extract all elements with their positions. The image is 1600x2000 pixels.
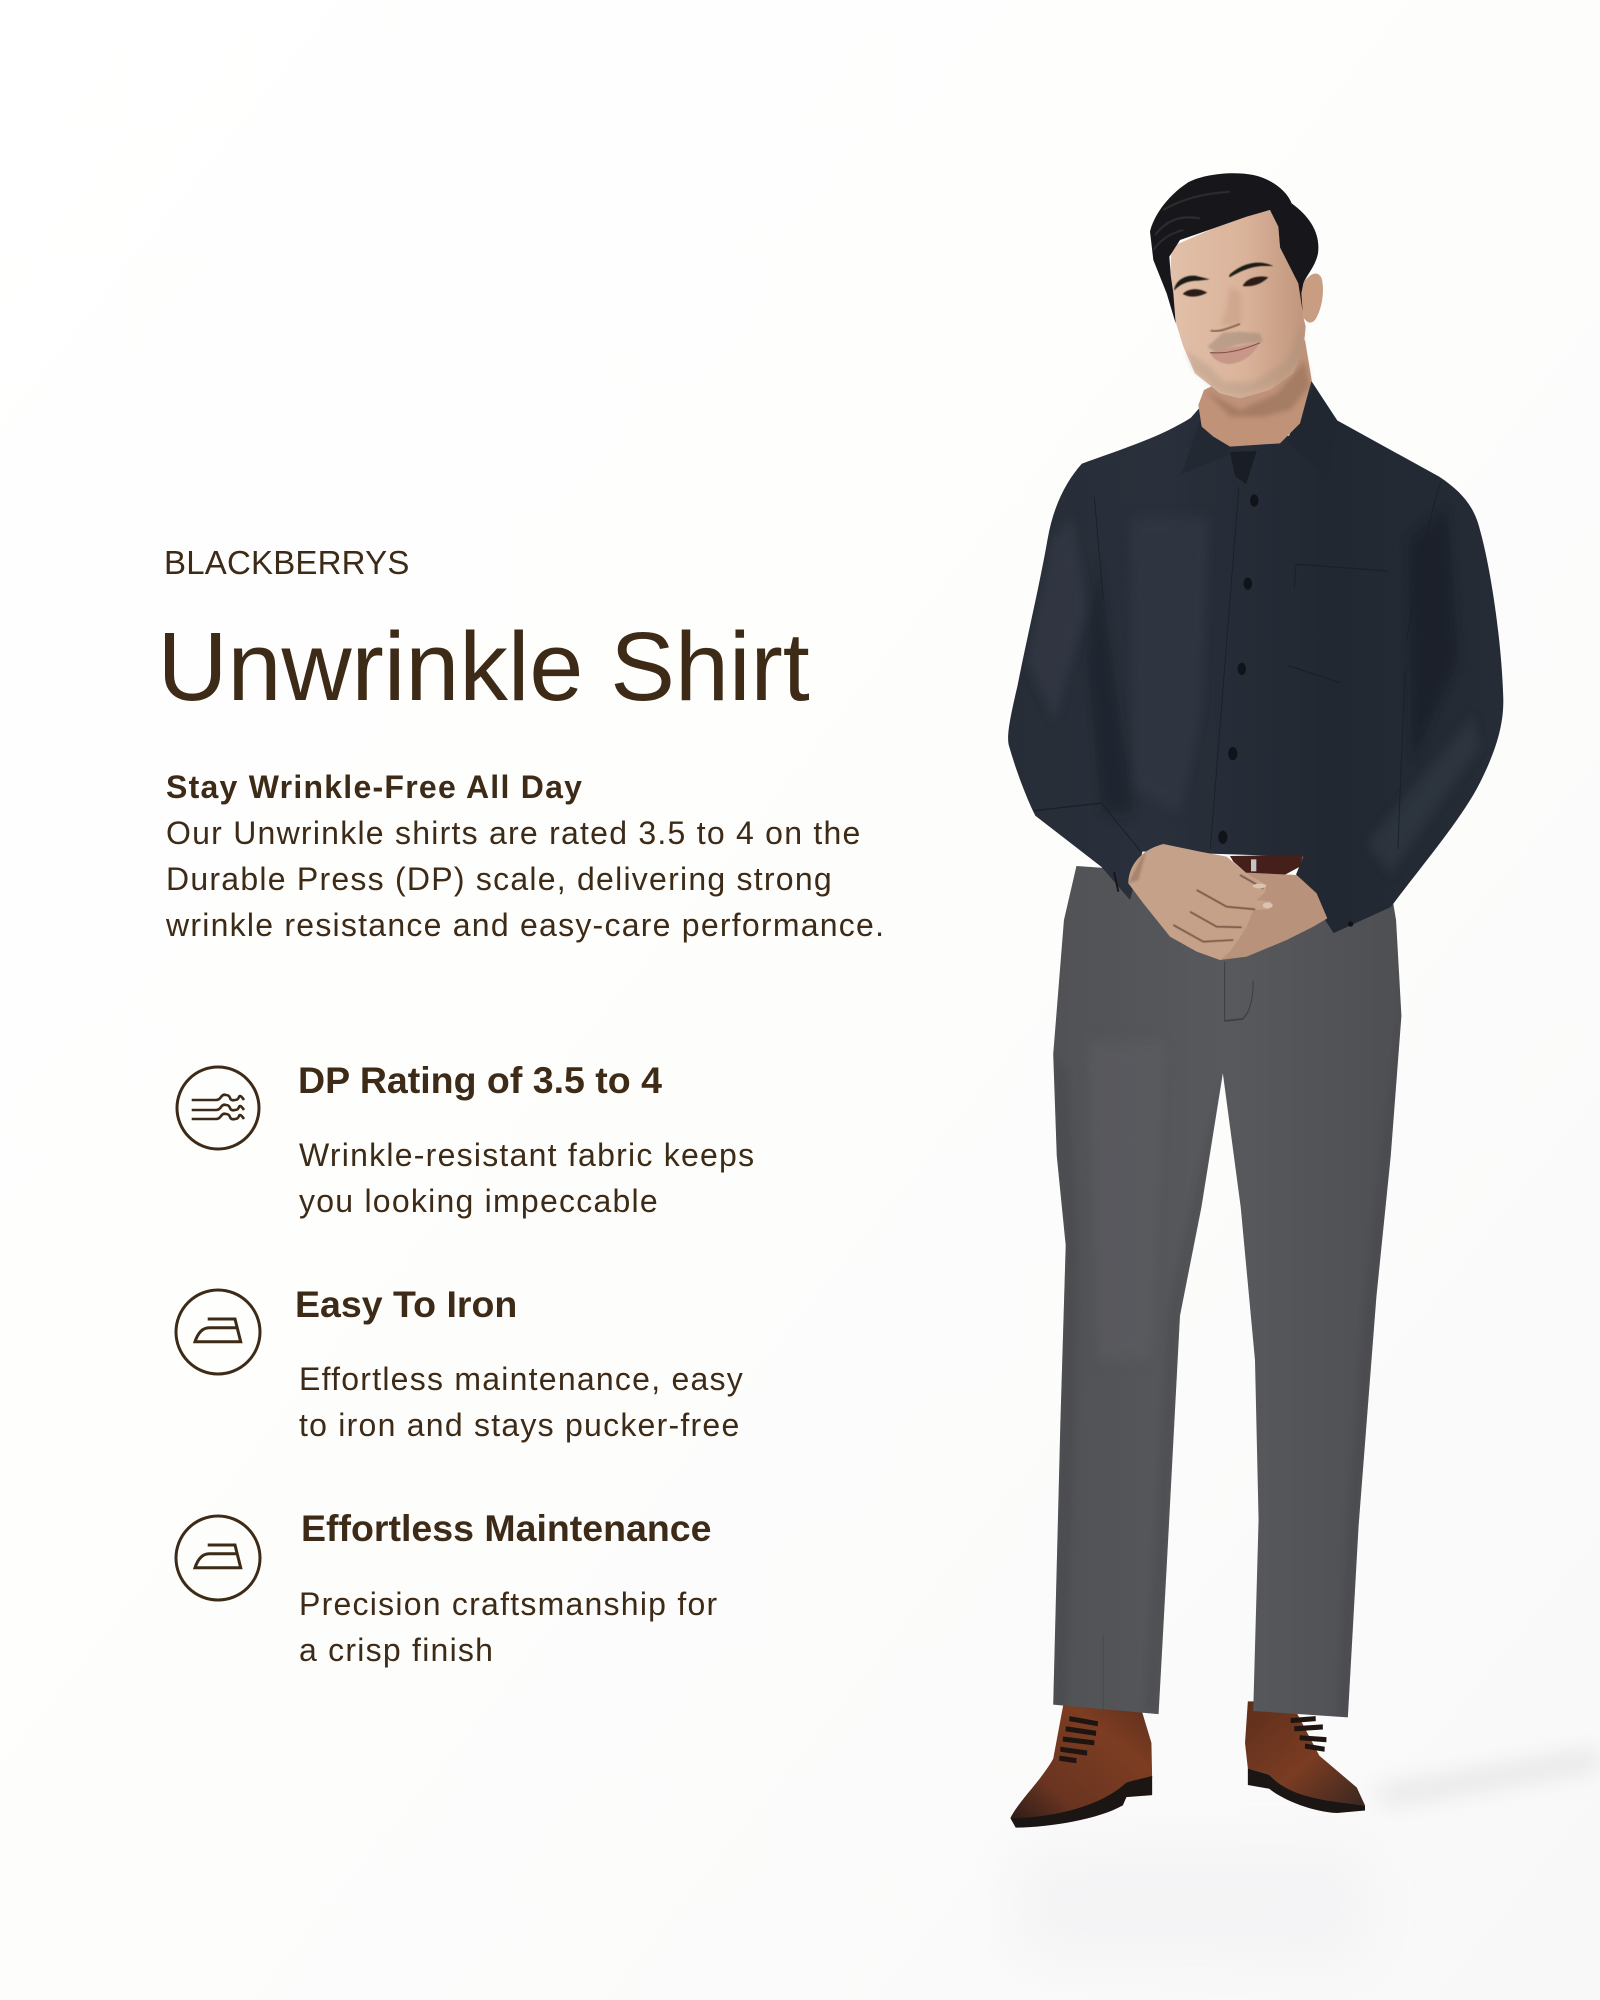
icon: fabric waves (177, 1067, 259, 1149)
neck, head and hair (1150, 173, 1323, 447)
description: easy to iron (299, 1361, 744, 1443)
shirt (1008, 380, 1503, 933)
eyebrows (1174, 263, 1273, 291)
description: effortless maintenance: Precision craftsmanship for (299, 1586, 718, 1622)
floor reflection (1015, 1850, 1365, 1960)
nose (1211, 324, 1240, 331)
eyes (1183, 276, 1268, 297)
description: effortless maintenance (299, 1586, 718, 1668)
ear (1298, 274, 1323, 323)
face (1170, 210, 1306, 398)
shirt buttons (1218, 494, 1259, 844)
hair (1150, 173, 1318, 323)
heading: effortless maintenance: Effortless Maintenance (301, 1507, 712, 1549)
lips (1210, 343, 1260, 364)
title: Unwrinkle Shirt (158, 612, 810, 721)
description: easy to iron: Effortless maintenance, easy (299, 1361, 744, 1397)
intro subheading: Stay Wrinkle-Free All Day (166, 769, 583, 805)
stubble (1185, 320, 1303, 397)
floor shadow (1370, 1750, 1600, 1804)
hands (1114, 844, 1353, 960)
description: easy to iron: to iron and stays pucker-free (299, 1407, 740, 1443)
intro paragraph: wrinkle resistance and easy-care performance. (165, 907, 885, 943)
intro paragraph (165, 815, 885, 943)
description: DP rating: Wrinkle-resistant fabric keeps (299, 1137, 755, 1173)
description: DP rating (299, 1137, 755, 1219)
heading: DP rating: DP Rating of 3.5 to 4 (298, 1059, 662, 1101)
intro paragraph: Durable Press (DP) scale, delivering strong (166, 861, 833, 897)
brand name: BLACKBERRYS (164, 544, 410, 581)
description: DP rating: you looking impeccable (299, 1183, 659, 1219)
icon: iron (176, 1290, 260, 1374)
feature: effortless maintenance (176, 1507, 718, 1668)
intro text block (165, 769, 885, 943)
icon: iron (176, 1516, 260, 1600)
feature: easy to iron (176, 1283, 744, 1443)
belt (1230, 855, 1303, 877)
collar (1182, 395, 1237, 474)
heading: easy to iron: Easy To Iron (295, 1283, 517, 1325)
intro paragraph: Our Unwrinkle shirts are rated 3.5 to 4 on the (166, 815, 862, 851)
shoes (1010, 1701, 1365, 1828)
feature: DP rating (177, 1059, 755, 1219)
man figure (1008, 173, 1503, 1828)
trousers (1053, 866, 1401, 1717)
description: effortless maintenance: a crisp finish (299, 1632, 494, 1668)
